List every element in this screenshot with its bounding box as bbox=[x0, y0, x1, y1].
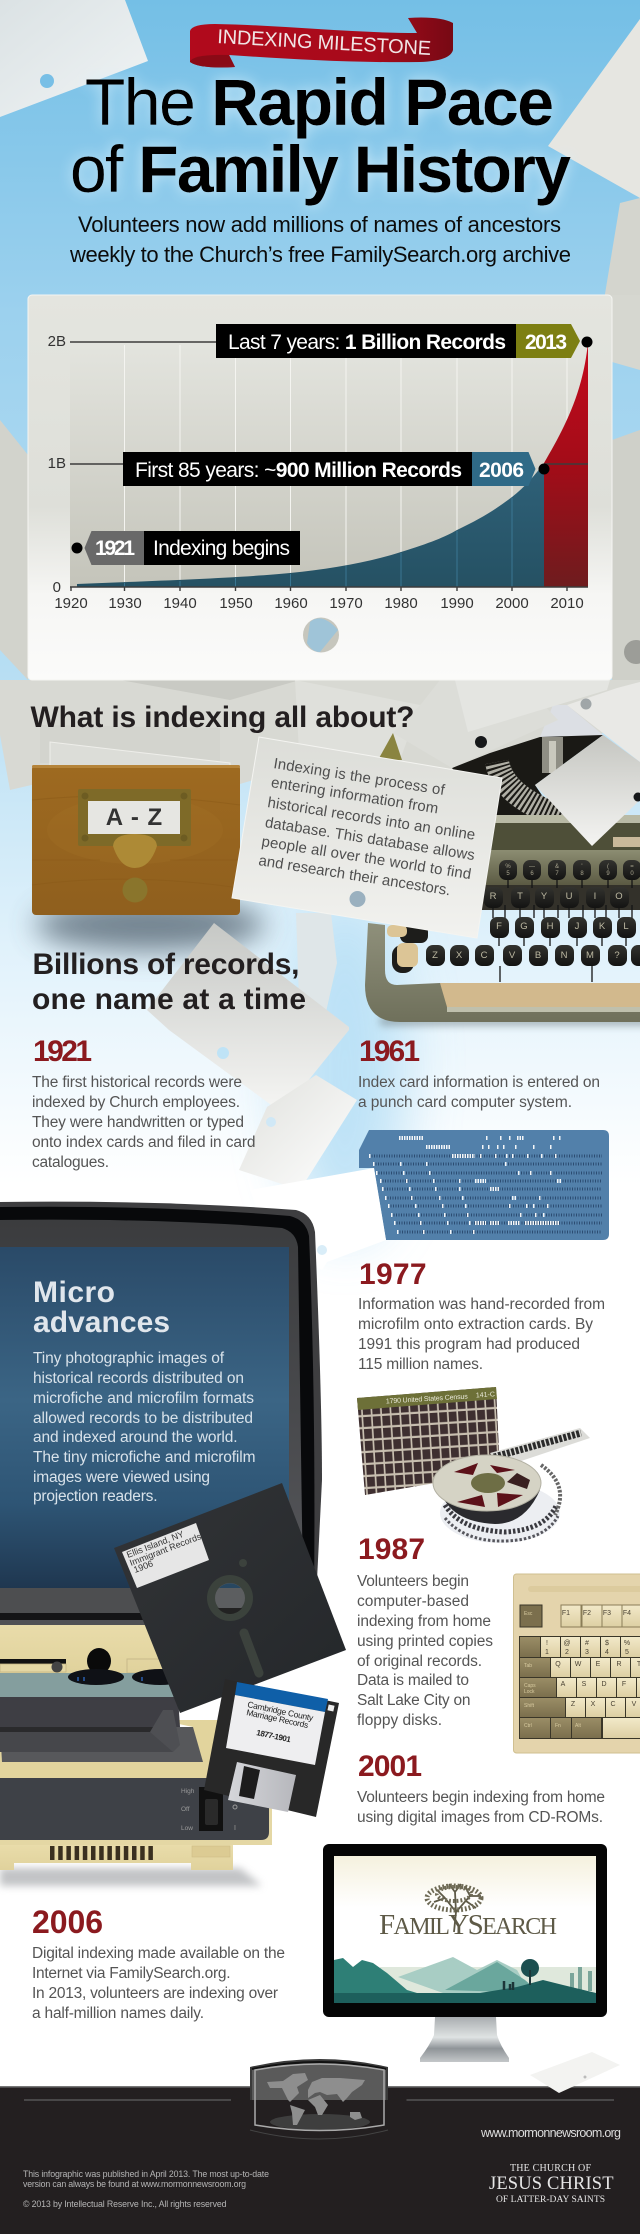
number row: 2 bbox=[565, 1649, 569, 1656]
microfiche sheet bbox=[357, 1387, 500, 1495]
drawer shadow bbox=[35, 899, 265, 951]
micro advances text: allowed records to be distributed bbox=[33, 1410, 253, 1427]
timeline: 1961 bbox=[358, 1035, 600, 1111]
white label bbox=[226, 1695, 325, 1765]
typewriter keys row 2: T bbox=[517, 891, 523, 902]
FamilySearch wordmark: FAMILYSEARCH bbox=[379, 1909, 557, 1941]
shutter bbox=[228, 1762, 296, 1812]
typewriter keys row 4: M bbox=[586, 950, 594, 961]
paper: behind Billions heading bbox=[147, 923, 349, 1113]
number row: 4 bbox=[605, 1649, 609, 1656]
typewriter keys row 4: V bbox=[509, 950, 516, 961]
timeline: 2006: 2006 bbox=[32, 1904, 103, 1940]
typewriter keys row 4: N bbox=[561, 950, 568, 961]
switch labels bbox=[181, 1788, 237, 1832]
title: The Rapid Pace bbox=[85, 65, 553, 139]
number row: $ bbox=[605, 1640, 609, 1647]
qwerty row: Tab bbox=[524, 1663, 532, 1669]
shift row: V bbox=[632, 1701, 637, 1708]
small paper bbox=[530, 2052, 620, 2093]
typewriter keys row 4 bbox=[426, 945, 640, 966]
home row: A bbox=[561, 1681, 566, 1688]
timeline: 1987: Data is mailed to bbox=[357, 1672, 469, 1689]
label: last 7 years bbox=[216, 324, 592, 358]
typewriter side keys bbox=[387, 925, 428, 973]
reader slot bbox=[0, 1659, 66, 1672]
timeline: 1987: 1987 bbox=[358, 1533, 425, 1566]
disk label bbox=[122, 1523, 209, 1588]
banner ribbon bbox=[190, 18, 453, 67]
typewriter keys row 4: Z bbox=[432, 950, 438, 961]
typewriter keys row 3: J bbox=[575, 921, 580, 932]
timeline: 1977 bbox=[358, 1258, 605, 1373]
typewriter keys row 1: & bbox=[555, 864, 559, 870]
card text: historical records into an online bbox=[266, 794, 476, 844]
reader body bbox=[0, 1625, 170, 1673]
number row: 1 bbox=[545, 1649, 549, 1656]
x-axis labels: 1960 bbox=[274, 595, 308, 612]
heading: billions of records bbox=[32, 948, 306, 1016]
heading: micro advances: advances bbox=[33, 1306, 170, 1339]
axes bbox=[70, 342, 588, 591]
number row: 3 bbox=[585, 1649, 589, 1656]
publication note: version can always be found at www.mormonnewsroom.org bbox=[23, 2179, 246, 2189]
x-axis labels: 1940 bbox=[163, 595, 197, 612]
esc and function keys bbox=[520, 1605, 640, 1627]
church logo: THE CHURCH OF bbox=[510, 2163, 591, 2174]
file drawer bbox=[32, 765, 240, 915]
bottom row: Alt bbox=[575, 1723, 581, 1729]
timeline: 1921: 1921 bbox=[33, 1035, 92, 1068]
typewriter keys row 1: 0 bbox=[630, 871, 634, 877]
micro advances text: projection readers. bbox=[33, 1488, 158, 1505]
card hole bbox=[350, 891, 366, 907]
typewriter keys row 3: L bbox=[623, 921, 629, 932]
home row: Lock bbox=[524, 1689, 535, 1695]
switch bbox=[199, 1787, 223, 1831]
paper A bbox=[455, 680, 610, 732]
paper: middle white bbox=[239, 1075, 357, 1190]
number row: # bbox=[585, 1640, 589, 1647]
timeline: 1921 bbox=[32, 1035, 256, 1171]
chart panel bbox=[28, 295, 612, 680]
heading: micro advances: Micro bbox=[33, 1276, 115, 1309]
monitor screen bbox=[334, 1856, 596, 2003]
typewriter keys row 2: U bbox=[566, 891, 573, 902]
world map plate bbox=[250, 2059, 388, 2139]
typewriter keys row 2 bbox=[484, 887, 629, 908]
disk hub bbox=[207, 1559, 259, 1673]
micro advances text: microfiche and microfilm formats bbox=[33, 1390, 254, 1407]
y-axis labels: 1B bbox=[48, 455, 66, 472]
panel hole bbox=[303, 618, 339, 652]
timeline: 2001 bbox=[357, 1750, 605, 1826]
vent bbox=[50, 1846, 155, 1860]
typewriter shadow bbox=[380, 1016, 640, 1026]
blue label bbox=[235, 1682, 328, 1712]
typewriter body bbox=[480, 815, 640, 910]
reel windows bbox=[454, 1463, 530, 1507]
timeline: 2001: 2001 bbox=[358, 1750, 422, 1783]
film roll bbox=[440, 1465, 560, 1543]
switch labels: Low bbox=[181, 1825, 193, 1832]
esc and function keys: F2 bbox=[583, 1610, 591, 1617]
typewriter carriage bbox=[452, 735, 603, 822]
card text: Indexing is the process of bbox=[272, 755, 447, 799]
paper: top right bbox=[548, 19, 640, 300]
website: www.mormonnewsroom.org bbox=[480, 2126, 621, 2140]
x-axis labels: 1930 bbox=[108, 595, 142, 612]
number row: @ bbox=[563, 1640, 571, 1647]
microfiche sheet: 141-C bbox=[476, 1391, 495, 1399]
monitor shadow bbox=[0, 1868, 262, 1886]
handle bbox=[113, 834, 157, 868]
paper B bbox=[393, 680, 558, 768]
x-axis labels: 1920 bbox=[54, 595, 88, 612]
number row: ! bbox=[546, 1640, 548, 1647]
timeline: 1977: 1977 bbox=[359, 1258, 426, 1291]
microfiche sheet: 1790 United States Census bbox=[386, 1393, 468, 1405]
floppy disk: 5.25 inch: 1906 bbox=[132, 1558, 154, 1575]
plot background bbox=[70, 345, 588, 587]
esc and function keys: F4 bbox=[623, 1610, 631, 1617]
typewriter keys row 1 bbox=[499, 860, 640, 880]
micro advances text: and indexed around the world. bbox=[33, 1429, 238, 1446]
typewriter space bar bbox=[440, 983, 640, 1012]
timeline: 1921: catalogues. bbox=[32, 1154, 109, 1171]
punched marks bbox=[369, 1138, 562, 1232]
timeline: 2006: Internet via FamilySearch.org. bbox=[32, 1965, 230, 1982]
y-axis labels: 2B bbox=[48, 333, 66, 350]
typewriter keys row 1: 9 bbox=[606, 871, 610, 877]
esc and function keys: F3 bbox=[603, 1610, 611, 1617]
timeline: 1987: Salt Lake City on bbox=[357, 1692, 470, 1709]
title bbox=[70, 65, 571, 206]
reader inset bbox=[127, 1659, 167, 1673]
timeline: 2001: using digital images from CD-ROMs. bbox=[357, 1809, 603, 1826]
type struts bbox=[493, 878, 632, 982]
qwerty row: R bbox=[616, 1661, 622, 1668]
landscape bbox=[334, 1957, 596, 2003]
switch labels: High bbox=[181, 1788, 195, 1795]
y-axis labels: 0 bbox=[53, 579, 61, 596]
qwerty row: Q bbox=[555, 1661, 561, 1668]
typewriter keys row 3: G bbox=[520, 921, 528, 932]
label: 1921 bbox=[72, 531, 300, 565]
subtitle: weekly to the Church’s free FamilySearch.org archive bbox=[69, 242, 571, 267]
base inset bbox=[192, 1846, 230, 1857]
publication note: © 2013 by Intellectual Reserve Inc., All rights reserved bbox=[23, 2199, 227, 2209]
typewriter keys row 1: ( bbox=[607, 864, 609, 870]
timeline: 1987: indexing from home bbox=[357, 1613, 491, 1630]
shift row bbox=[520, 1698, 640, 1717]
paper: top left bbox=[0, 0, 148, 117]
micro advances text: images were viewed using bbox=[33, 1469, 210, 1486]
film strip bbox=[490, 1428, 590, 1468]
heading: billions of records: Billions of records, bbox=[32, 948, 300, 981]
x-axis labels bbox=[54, 595, 584, 612]
typewriter keys row 4: X bbox=[456, 950, 463, 961]
paper C bbox=[567, 682, 640, 762]
typewriter keys row 2: O bbox=[615, 891, 623, 902]
church logo: OF LATTER-DAY SAINTS bbox=[496, 2195, 605, 2205]
title: of Family History bbox=[70, 132, 571, 206]
floppy disk: 3.5 inch: Cambridge County bbox=[247, 1699, 315, 1723]
typewriter keys row 4: B bbox=[535, 950, 541, 961]
typewriter keys row 1: = bbox=[630, 864, 634, 870]
beige keyboard bbox=[514, 1574, 640, 1753]
timeline: 1961: Index card information is entered on bbox=[358, 1074, 600, 1091]
heading: what is indexing: What is indexing all about? bbox=[30, 701, 414, 734]
area: first 85 years bbox=[77, 463, 544, 587]
banner ribbon: INDEXING MILESTONE bbox=[217, 26, 432, 60]
typewriter keys row 1: 8 bbox=[580, 871, 584, 877]
timeline: 1987: floppy disks. bbox=[357, 1712, 442, 1729]
key well bbox=[519, 1636, 640, 1739]
reel hub bbox=[471, 1473, 505, 1493]
FamilySearch tree bbox=[427, 1884, 481, 1932]
timeline: 1977: 115 million names. bbox=[358, 1356, 483, 1373]
film reel bbox=[433, 1428, 590, 1543]
diamond paper bbox=[535, 735, 640, 846]
typewriter keys row 4: C bbox=[481, 950, 488, 961]
church logo: JESUS CHRIST bbox=[489, 2174, 614, 2194]
typewriter keys row 2: R bbox=[490, 891, 497, 902]
desktop monitor bbox=[323, 1844, 607, 2062]
typewriter keys row 3 bbox=[490, 917, 636, 938]
typewriter keys row 1: ' bbox=[581, 864, 583, 870]
control panel bbox=[0, 1778, 272, 1845]
typewriter keys row 1: — bbox=[529, 864, 535, 870]
bottom row: Fn bbox=[555, 1723, 561, 1729]
y-axis labels bbox=[48, 333, 66, 596]
paper gap bbox=[540, 705, 603, 737]
reader lower bbox=[0, 1697, 230, 1778]
timeline: 2006 bbox=[32, 1904, 285, 2022]
label: last 7 years: Last 7 years: 1 Billion Records bbox=[228, 331, 506, 354]
subtitle: Volunteers now add millions of names of ancestors bbox=[78, 212, 561, 237]
x-axis labels: 1990 bbox=[440, 595, 474, 612]
publication note: This infographic was published in April 2013. The most up-to-date bbox=[23, 2169, 269, 2179]
timeline: 1987: of original records. bbox=[357, 1653, 482, 1670]
typewriter keys row 3: K bbox=[599, 921, 606, 932]
x-axis labels: 1970 bbox=[329, 595, 363, 612]
timeline: 1921: indexed by Church employees. bbox=[32, 1094, 240, 1111]
floppy disk: 5.25 inch: Immigrant Records bbox=[128, 1531, 203, 1568]
heading: micro advances bbox=[33, 1276, 170, 1339]
papers: over typewriter bbox=[378, 680, 640, 846]
floppy disk: 5.25 inch: Ellis Island, NY bbox=[125, 1529, 185, 1560]
background blue glow bbox=[285, 900, 405, 1240]
micro advances text: The tiny microfiche and microfilm bbox=[33, 1449, 256, 1466]
number row bbox=[520, 1637, 640, 1657]
punch card bbox=[359, 1130, 609, 1240]
church logo bbox=[489, 2163, 614, 2205]
shift row: Shift bbox=[524, 1703, 535, 1709]
timeline: 1977: microfilm onto extraction cards. By bbox=[358, 1316, 593, 1333]
typewriter keys row 1: 7 bbox=[555, 871, 559, 877]
typewriter keys row 1: 6 bbox=[530, 871, 534, 877]
bottom row bbox=[520, 1718, 640, 1738]
timeline: 2001: Volunteers begin indexing from home bbox=[357, 1789, 605, 1806]
shift row: C bbox=[610, 1701, 616, 1708]
reader knob bbox=[87, 1648, 111, 1674]
label: 1921: 1921 bbox=[95, 537, 135, 560]
shift row: Z bbox=[571, 1701, 576, 1708]
reader dials bbox=[68, 1669, 188, 1685]
floppy disk: 5.25 inch bbox=[114, 1483, 346, 1713]
typewriter keys row 2: Y bbox=[541, 891, 548, 902]
knob bbox=[122, 878, 148, 902]
switch labels: I bbox=[234, 1825, 236, 1832]
typewriter keys row 4: ? bbox=[614, 950, 620, 961]
publication note bbox=[23, 2169, 269, 2209]
footer bbox=[0, 2052, 640, 2234]
typewriter keys row 1: 5 bbox=[506, 871, 510, 877]
home row: Caps bbox=[524, 1683, 536, 1689]
switch labels: Off bbox=[181, 1806, 190, 1813]
home row: D bbox=[601, 1681, 607, 1688]
label plate bbox=[78, 789, 191, 846]
papers: behind chart sides bbox=[0, 295, 640, 690]
monitor screen bbox=[0, 1247, 289, 1588]
timeline: 1987: using printed copies bbox=[357, 1633, 493, 1650]
timeline: 2006: a half-million names daily. bbox=[32, 2005, 204, 2022]
typewriter keys row 3: H bbox=[547, 921, 554, 932]
lower bezel bbox=[0, 1588, 304, 1625]
home row: S bbox=[582, 1681, 587, 1688]
papers: behind heading bbox=[0, 680, 640, 790]
subtitle bbox=[69, 212, 571, 267]
number row: 5 bbox=[625, 1649, 629, 1656]
area: last 7 years bbox=[544, 342, 588, 587]
qwerty row bbox=[520, 1658, 640, 1677]
olive sliver bbox=[378, 733, 402, 760]
timeline: 1987: Volunteers begin bbox=[357, 1573, 469, 1590]
typewriter frame bbox=[365, 923, 640, 1022]
card text: entering information from bbox=[270, 774, 439, 817]
label: last 7 years: 2013 bbox=[525, 331, 567, 354]
timeline: 2006: In 2013, volunteers are indexing over bbox=[32, 1985, 278, 2002]
note card bbox=[232, 737, 502, 938]
card text bbox=[257, 755, 476, 899]
timeline: 1921: onto index cards and filed in card bbox=[32, 1134, 256, 1151]
label: first 85 years: First 85 years: ~900 Million Records bbox=[135, 459, 462, 482]
label: 1921: Indexing begins bbox=[153, 537, 290, 560]
CRT monitor bbox=[0, 1202, 322, 1886]
label: first 85 years bbox=[123, 452, 550, 486]
timeline: 1961: 1961 bbox=[359, 1035, 420, 1068]
home row: F bbox=[622, 1681, 626, 1688]
typewriter bbox=[365, 705, 640, 1026]
esc and function keys: F1 bbox=[562, 1610, 570, 1617]
micro advances text bbox=[33, 1350, 256, 1505]
number row: % bbox=[624, 1640, 630, 1647]
esc and function keys: Esc bbox=[524, 1611, 533, 1617]
paper: over punch card bbox=[250, 1168, 386, 1270]
floppy disk: 3.5 inch bbox=[204, 1679, 339, 1817]
x-axis labels: 2010 bbox=[550, 595, 584, 612]
micro advances text: historical records distributed on bbox=[33, 1370, 244, 1387]
monitor frame bbox=[323, 1844, 607, 2017]
floppy disk: 3.5 inch: Marriage Records bbox=[246, 1707, 309, 1730]
continents bbox=[267, 2073, 365, 2125]
timeline: 2006: Digital indexing made available on the bbox=[32, 1945, 285, 1962]
monitor bezel bbox=[0, 1202, 322, 1600]
label: first 85 years: 2006 bbox=[479, 459, 524, 482]
timeline: 1961: a punch card computer system. bbox=[358, 1094, 572, 1111]
timeline: 1921: The first historical records were bbox=[32, 1074, 242, 1091]
bottom row: Ctrl bbox=[524, 1723, 532, 1729]
timeline: 1987: computer-based bbox=[357, 1593, 469, 1610]
card text: people all over the world to find bbox=[260, 833, 472, 883]
timeline: 1977: 1991 this program had produced bbox=[358, 1336, 580, 1353]
reel face bbox=[433, 1455, 541, 1511]
typewriter keys row 1: % bbox=[505, 864, 511, 870]
x-axis labels: 1950 bbox=[219, 595, 253, 612]
timeline: 1921: They were handwritten or typed bbox=[32, 1114, 244, 1131]
home row bbox=[520, 1678, 640, 1697]
reader base bbox=[0, 1845, 233, 1870]
glass band bbox=[0, 1673, 178, 1697]
qwerty row: E bbox=[596, 1661, 601, 1668]
monitor stand bbox=[420, 2017, 509, 2062]
card text: and research their ancestors. bbox=[257, 852, 452, 899]
x-axis labels: 2000 bbox=[495, 595, 529, 612]
heading: billions of records: one name at a time bbox=[32, 983, 306, 1016]
typewriter keys row 3: F bbox=[496, 921, 502, 932]
card text: database. This database allows bbox=[264, 814, 476, 864]
shift row: X bbox=[591, 1701, 596, 1708]
strip paper bbox=[296, 913, 337, 1030]
qwerty row: W bbox=[575, 1661, 582, 1668]
card holes bbox=[369, 1156, 602, 1232]
timeline: 1977: Information was hand-recorded from bbox=[358, 1296, 605, 1313]
typewriter keys row 2: I bbox=[594, 891, 596, 902]
floppy disk: 3.5 inch: 1877-1901 bbox=[256, 1728, 292, 1744]
micro advances text: Tiny photographic images of bbox=[33, 1350, 225, 1367]
label plate: A - Z bbox=[106, 804, 163, 831]
timeline: 1987 bbox=[357, 1533, 493, 1729]
x-axis labels: 1980 bbox=[384, 595, 418, 612]
